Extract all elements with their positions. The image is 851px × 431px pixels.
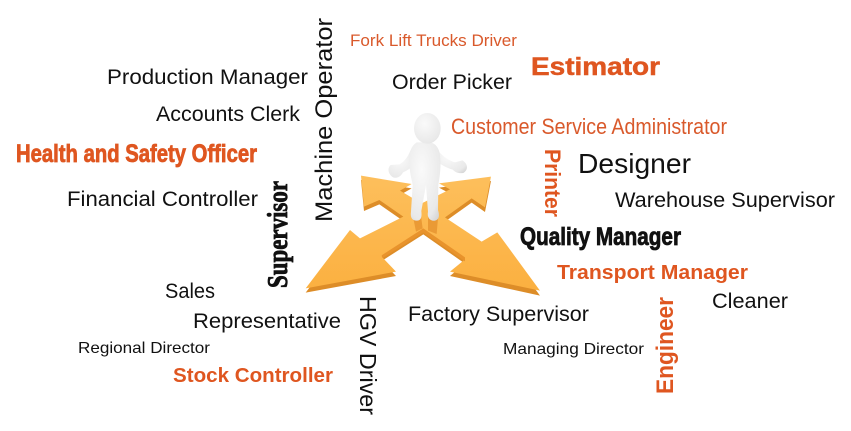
label: Customer Service Administrator: Customer Service Administrator	[451, 114, 727, 139]
label: Machine Operator (rotated): Machine Operator	[311, 18, 338, 222]
label: Engineer (rotated): Engineer	[652, 297, 679, 394]
label: Sales: Sales	[165, 280, 215, 303]
label: Managing Director: Managing Director	[503, 341, 645, 358]
label: Transport Manager: Transport Manager	[557, 261, 748, 284]
label: Order Picker: Order Picker	[392, 71, 512, 94]
label: Production Manager: Production Manager	[107, 66, 308, 89]
label: Cleaner: Cleaner	[712, 290, 788, 313]
label: Designer: Designer	[578, 148, 691, 179]
label: Printer (rotated): Printer	[540, 149, 565, 217]
label: Factory Supervisor: Factory Supervisor	[408, 303, 589, 326]
central illustration: figure on crossroads arrows	[306, 113, 540, 296]
label: Supervisor (rotated): Supervisor	[263, 181, 294, 288]
label: Financial Controller: Financial Controller	[67, 188, 258, 211]
icon: four-way arrows	[306, 176, 540, 296]
label: Quality Manager: Quality Manager	[520, 223, 681, 251]
label: Fork Lift Trucks Driver: Fork Lift Trucks Driver	[350, 31, 517, 50]
label: HGV Driver (rotated): HGV Driver	[355, 296, 381, 415]
icon: white 3D figure	[389, 113, 467, 221]
label: Warehouse Supervisor: Warehouse Supervisor	[615, 189, 835, 212]
label: Health and Safety Officer: Health and Safety Officer	[16, 140, 257, 168]
label: Representative: Representative	[193, 310, 341, 333]
label: Regional Director: Regional Director	[78, 340, 211, 357]
label: Accounts Clerk: Accounts Clerk	[156, 103, 301, 126]
label: Stock Controller: Stock Controller	[173, 365, 333, 387]
label: Estimator: Estimator	[531, 53, 660, 81]
